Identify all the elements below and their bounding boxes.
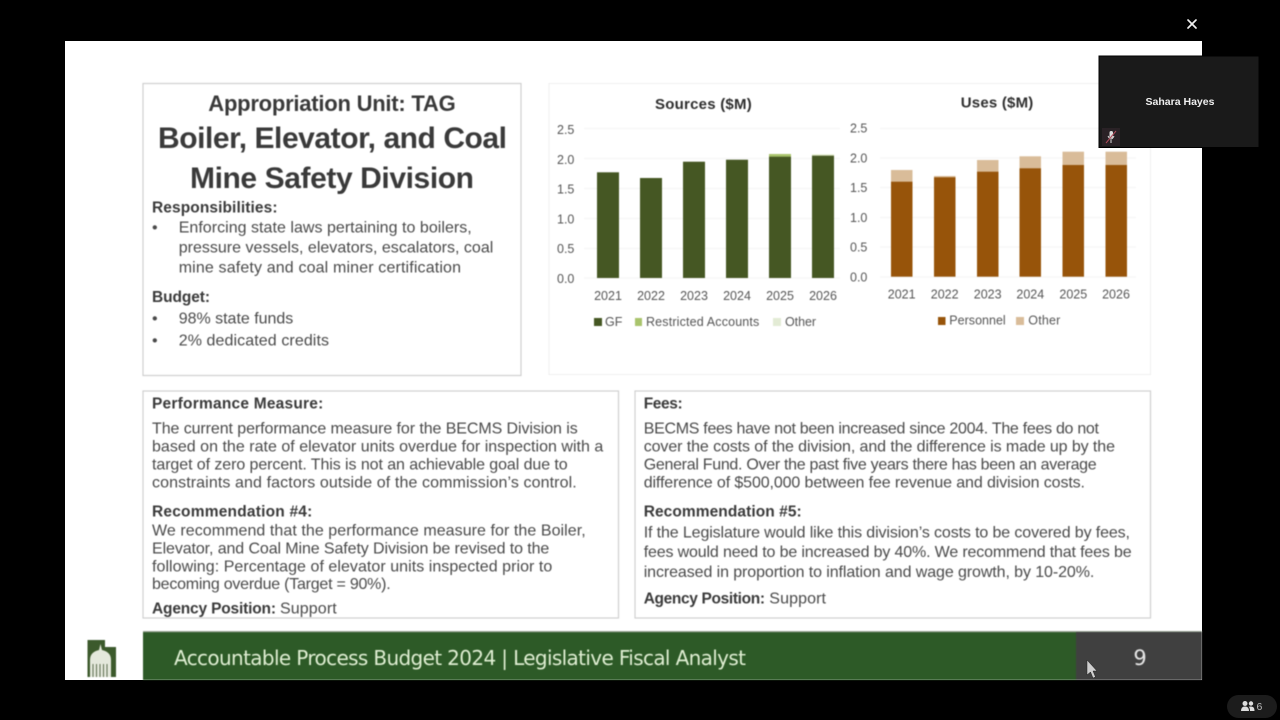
text block: recommendation 4: Elevator, and Coal Mine Safety Division be revised to the (152, 541, 549, 558)
agency position: recommendation 4 (152, 600, 337, 617)
y axis labels: uses (850, 122, 867, 284)
heading: division title (158, 122, 507, 195)
y axis labels: uses: 0.5 (850, 240, 867, 254)
x axis labels: sources: 2025 (766, 289, 794, 303)
y axis labels: uses: 0.0 (850, 270, 867, 284)
text block: recommendation 5 (644, 524, 1132, 581)
icon: mouse cursor (1087, 660, 1097, 678)
y axis labels: uses: 1.5 (850, 181, 867, 195)
text block: responsibilities: mine safety and coal miner certification (179, 259, 461, 276)
x axis labels: sources: 2023 (680, 289, 708, 303)
agency position: recommendation 5: Agency Position: (644, 590, 765, 607)
text block: recommendation 5: If the Legislature would like this division’s costs to be covered by fees, (644, 524, 1130, 541)
text block: budget: 98% state funds (179, 310, 293, 327)
text block: recommendation 5: fees would need to be increased by 40%. We recommend that fees be (644, 544, 1132, 561)
text block: fees: BECMS fees have not been increased since 2004. The fees do not (644, 421, 1100, 438)
text block: responsibilities: pressure vessels, elevators, escalators, coal (179, 239, 493, 256)
heading: performance measure: Performance Measure: (152, 395, 323, 412)
agency position: recommendation 5 (644, 590, 827, 607)
x axis labels: uses: 2025 (1059, 287, 1087, 301)
icon: capitol logo (88, 640, 116, 677)
icon: people (1241, 701, 1254, 711)
text block: performance measure: constraints and factors outside of the commission’s control. (152, 475, 577, 492)
x axis labels: sources: 2022 (637, 289, 665, 303)
chart: sources (557, 96, 840, 329)
text block: performance measure: based on the rate of elevator units overdue for inspection with a (152, 439, 603, 456)
x axis labels: uses: 2022 (931, 287, 959, 301)
y axis labels: sources: 0.0 (557, 272, 574, 286)
y axis labels: sources: 1.0 (557, 212, 574, 226)
text block: fees: difference of $500,000 between fee revenue and division costs. (644, 475, 1085, 492)
participants count: 6 (1256, 701, 1262, 713)
x axis labels: sources: 2024 (723, 289, 751, 303)
participant video tile (1099, 56, 1259, 148)
x axis labels: uses: 2023 (974, 287, 1002, 301)
x axis labels: uses: 2021 (888, 287, 916, 301)
text block: responsibilities: Enforcing state laws pertaining to boilers, (179, 220, 472, 237)
panel: performance measure (143, 391, 618, 618)
x axis labels: uses: 2024 (1016, 287, 1044, 301)
heading: division title: Mine Safety Division (190, 162, 474, 195)
text block: responsibilities (152, 200, 493, 276)
text block: recommendation 4: becoming overdue (Target = 90%). (152, 576, 391, 593)
heading: fees: Fees: (644, 395, 683, 412)
text block: budget: 2% dedicated credits (179, 332, 329, 349)
participant name: Sahara Hayes (1146, 96, 1215, 108)
text block: fees: cover the costs of the division, and the difference is made up by the (644, 439, 1115, 456)
y axis labels: uses: 2.0 (850, 152, 867, 166)
page number panel: 9 (1133, 646, 1147, 670)
bars: sources (597, 154, 834, 278)
text block: responsibilities: Responsibilities: (152, 200, 278, 217)
x axis labels: uses: 2026 (1102, 287, 1130, 301)
heading: division title: Boiler, Elevator, and Coal (158, 122, 507, 155)
participants count badge (1227, 695, 1277, 718)
text block: budget: • (152, 310, 158, 327)
text block: fees: General Fund. Over the past five years there has been an average (644, 457, 1097, 474)
icon: close button (1188, 20, 1196, 28)
legend: uses (938, 314, 1060, 328)
y axis labels: sources: 2.0 (557, 153, 574, 167)
text block: recommendation 4: We recommend that the performance measure for the Boiler, (152, 523, 586, 540)
agency position: recommendation 4: Agency Position: (152, 600, 276, 617)
footer title: Accountable Process Budget 2024 | Legislative Fiscal Analyst (174, 646, 746, 670)
icon: muted microphone (1102, 128, 1120, 146)
text block: budget (152, 289, 329, 349)
text block: recommendation 4: following: Percentage of elevator units inspected prior to (152, 558, 552, 575)
text block: budget: • (152, 332, 158, 349)
text block: fees (644, 421, 1115, 492)
x axis labels: sources: 2026 (809, 289, 837, 303)
y axis labels: uses: 1.0 (850, 211, 867, 225)
agency position: recommendation 5: Support (769, 590, 827, 607)
panel: charts (549, 84, 1150, 374)
panel: fees (635, 391, 1150, 618)
y axis labels: sources: 2.5 (557, 123, 574, 137)
legend: uses: Personnel (949, 314, 1006, 328)
text block: performance measure: target of zero percent. This is not an achievable goal due to (152, 457, 568, 474)
legend: sources (594, 315, 816, 329)
legend: uses: Other (1028, 314, 1060, 328)
y axis labels: sources (557, 123, 574, 286)
slide background (65, 41, 1202, 680)
y axis labels: sources: 1.5 (557, 182, 574, 196)
text block: performance measure: The current performance measure for the BECMS Division is (152, 421, 578, 438)
heading: appropriation unit: Appropriation Unit: TAG (208, 91, 456, 116)
bars: uses (891, 152, 1127, 277)
text block: responsibilities: • (152, 220, 158, 237)
text block: recommendation 5: increased in proportion to inflation and wage growth, by 10-20%. (644, 564, 1094, 581)
legend: sources: Other (785, 315, 816, 329)
x axis labels: sources (594, 289, 837, 303)
x axis labels: uses (888, 287, 1130, 301)
heading: recommendation 5: Recommendation #5: (644, 504, 802, 521)
chart: uses (850, 95, 1136, 328)
x axis labels: sources: 2021 (594, 289, 622, 303)
heading: recommendation 4: Recommendation #4: (152, 504, 312, 521)
text block: performance measure (152, 421, 603, 492)
y axis labels: sources: 0.5 (557, 242, 574, 256)
footer bar (143, 631, 1202, 680)
chart title: sources: Sources ($M) (655, 96, 752, 113)
y axis labels: uses: 2.5 (850, 122, 867, 136)
text block: budget: Budget: (152, 289, 210, 306)
page number panel (1076, 632, 1202, 680)
legend: sources: Restricted Accounts (646, 315, 759, 329)
panel: division overview (143, 84, 521, 376)
agency position: recommendation 4: Support (280, 600, 337, 617)
chart title: uses: Uses ($M) (961, 95, 1033, 112)
legend: sources: GF (605, 315, 623, 329)
text block: recommendation 4 (152, 523, 586, 593)
